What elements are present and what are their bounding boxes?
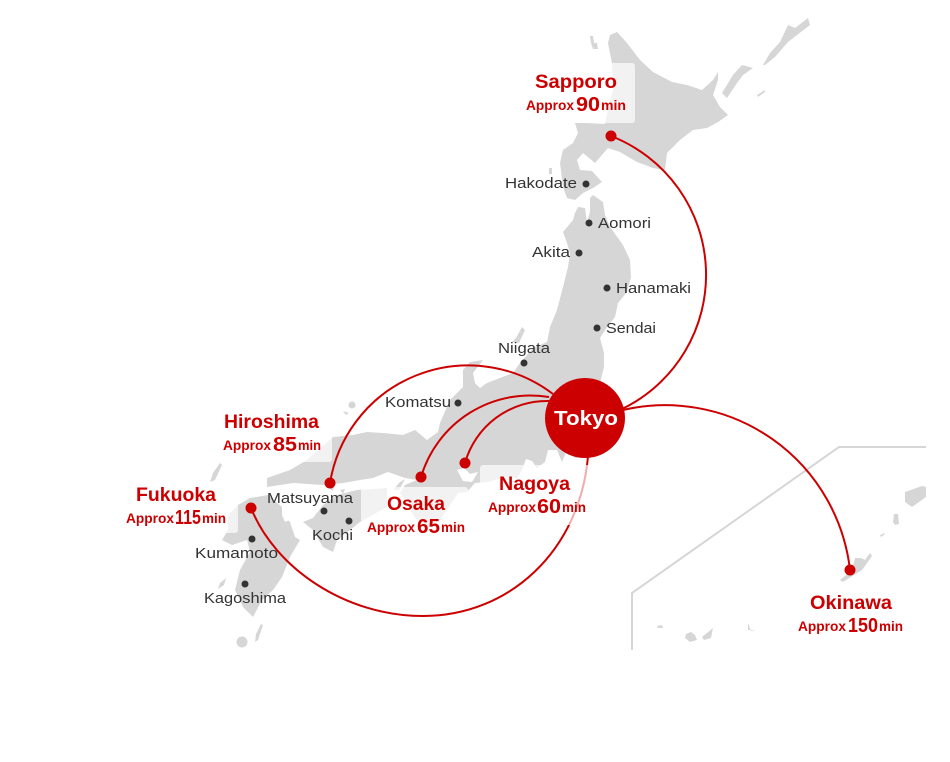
city labels: Matsuyama	[267, 490, 354, 507]
Shikoku	[303, 488, 387, 552]
bays	[282, 468, 478, 522]
city labels: Sendai	[606, 320, 656, 337]
city markers	[242, 180, 610, 588]
label: Hiroshima	[223, 412, 321, 456]
label: Osaka	[367, 494, 465, 538]
city labels: Kochi	[312, 527, 353, 544]
label: Okinawa	[798, 593, 903, 637]
small western islands	[210, 411, 349, 642]
destination dots	[246, 130, 856, 576]
Okinawa and Ryukyu islands	[657, 486, 926, 642]
label: Hiroshima: Hiroshima	[224, 412, 319, 433]
city labels: Komatsu	[385, 394, 451, 411]
label: Osaka: Osaka	[387, 494, 445, 515]
label: Fukuoka: min	[202, 511, 226, 526]
label: Hiroshima: min	[298, 438, 321, 453]
label: Nagoya: min	[562, 500, 586, 515]
city labels: Aomori	[598, 215, 651, 232]
label: Nagoya: 60	[537, 496, 561, 518]
Hokkaido	[560, 32, 728, 200]
label: Nagoya	[488, 474, 586, 518]
city labels: Akita	[532, 244, 571, 261]
Sado island	[512, 327, 525, 343]
city labels: Hakodate	[505, 175, 577, 192]
label: Osaka: min	[441, 520, 465, 535]
arc: Hiroshima	[330, 365, 553, 483]
arc: Okinawa	[623, 405, 850, 570]
label: Hiroshima: 85	[273, 434, 297, 456]
label: Nagoya: Approx	[488, 500, 536, 515]
arc: Fukuoka	[251, 456, 588, 616]
label: Okinawa: min	[879, 619, 903, 634]
city labels: Hanamaki	[616, 280, 691, 297]
city labels	[195, 175, 691, 607]
label: Sapporo: 90	[576, 94, 600, 116]
label: Okinawa: Okinawa	[810, 593, 892, 614]
city labels: Niigata	[498, 340, 551, 357]
region border line	[632, 447, 926, 650]
city labels: Kumamoto	[195, 545, 278, 562]
route arcs	[251, 136, 850, 616]
label: Okinawa: Approx	[798, 619, 846, 634]
label: Osaka: 65	[417, 516, 440, 538]
city labels: Kagoshima	[204, 590, 287, 607]
label: Fukuoka: Approx	[126, 511, 174, 526]
label: Sapporo: Approx	[526, 98, 574, 113]
label: Sapporo: min	[601, 98, 626, 113]
translucent label backgrounds	[125, 63, 635, 539]
Honshu	[267, 195, 631, 527]
arc: Sapporo	[611, 136, 706, 409]
label: Fukuoka	[126, 485, 226, 529]
Kyushu	[222, 495, 300, 617]
Tokyo hub	[545, 378, 625, 458]
label: Sapporo	[526, 72, 626, 116]
label: Okinawa: 150	[848, 615, 878, 637]
arc: Nagoya	[465, 401, 549, 463]
Kuril islands	[549, 18, 810, 174]
label: Hiroshima: Approx	[223, 438, 271, 453]
label: Osaka: Approx	[367, 520, 415, 535]
arc: Osaka	[421, 395, 549, 477]
Inland Sea islands and Awaji	[270, 479, 405, 528]
label: Nagoya: Nagoya	[499, 474, 570, 495]
label: Fukuoka: 115	[175, 507, 201, 529]
Tokyo hub: Tokyo	[554, 408, 618, 430]
map of Japan	[210, 18, 926, 648]
label: Sapporo: Sapporo	[535, 72, 617, 93]
label: Fukuoka: Fukuoka	[136, 485, 216, 506]
